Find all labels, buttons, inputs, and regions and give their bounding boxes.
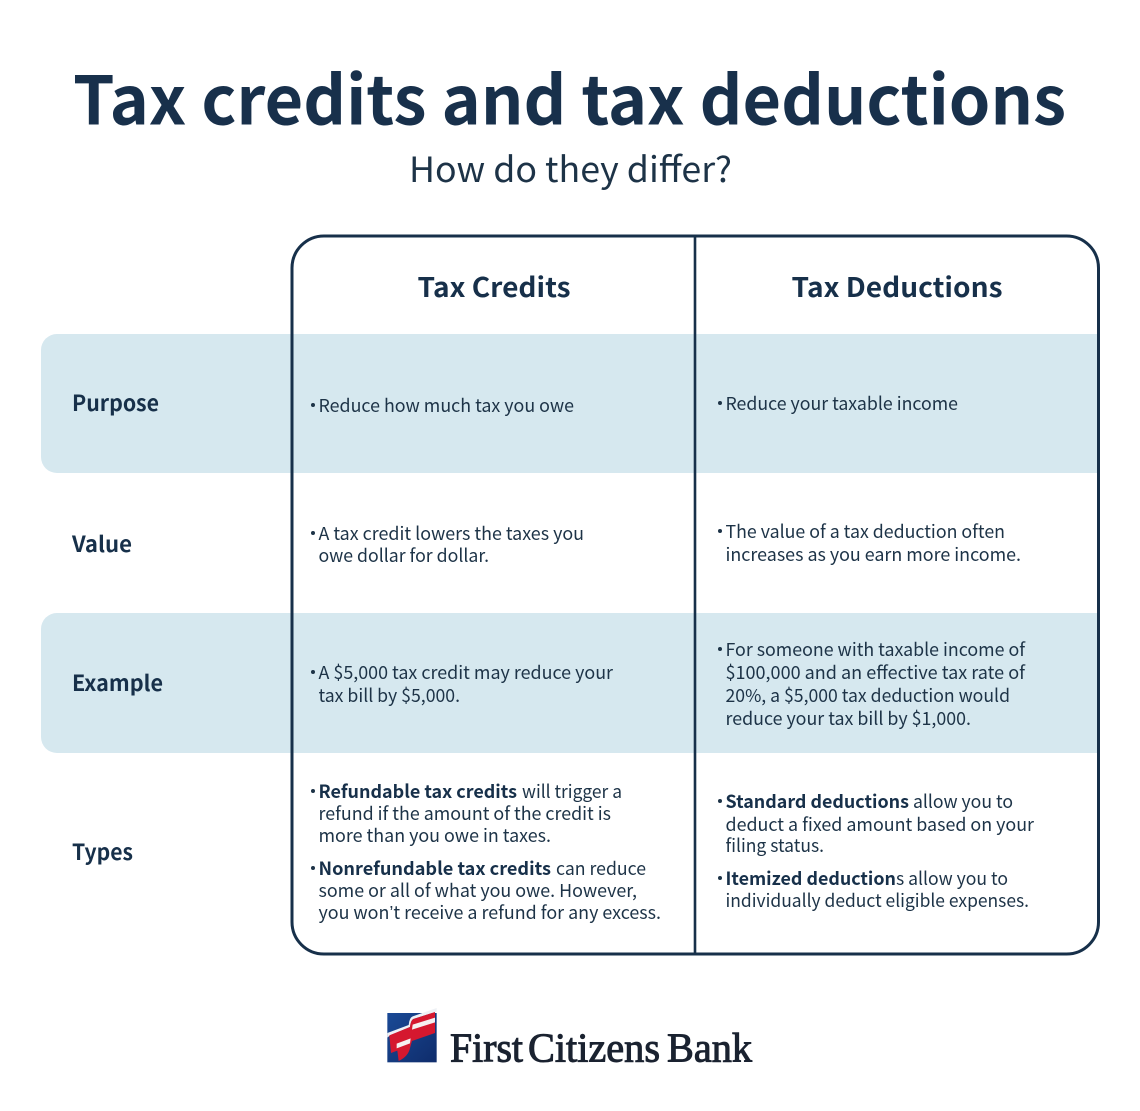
row label: purpose: Purpose [72,386,159,418]
example: tax deductions: For someone with taxable income of [726,636,1026,662]
example: tax credits: tax bill by $5,000. [318,682,460,708]
band: example row [41,613,1098,753]
band: purpose row [41,334,1098,473]
types: tax credits [311,778,661,925]
types: tax credits: Nonrefundable tax credits [318,855,551,881]
example: tax credits: A $5,000 tax credit may reduce your [318,659,614,685]
types: tax credits: will trigger a [522,778,622,804]
types: tax deductions: Standard deductions [726,788,909,814]
column divider [694,236,696,954]
subtitle: How do they differ? [409,142,732,193]
types: tax credits: more than you owe in taxes. [318,822,551,848]
logo: First Citizens Bank [387,1008,752,1070]
types: tax credits: refund if the amount of the credit is [318,800,611,826]
types: tax deductions: deduct a fixed amount based on your [726,811,1035,837]
example: tax deductions: $100,000 and an effective tax rate of [726,659,1026,685]
types: tax credits: can reduce [556,855,646,881]
row label: value: Value [71,527,132,559]
types: tax deductions: s allow you to [896,865,1008,891]
logo wordmark: Bank [667,1024,752,1070]
types: tax deductions [718,788,1035,913]
row label: types: Types [72,835,133,867]
types: tax deductions: filing status. [726,832,824,858]
heading: tax deductions: Tax Deductions [792,266,1002,305]
example: tax deductions: reduce your tax bill by $1,000. [726,705,971,731]
value: tax credits: A tax credit lowers the taxes you [318,520,584,546]
purpose: tax deductions: Reduce your taxable income [726,390,958,416]
value: tax credits: owe dollar for dollar. [318,542,489,568]
heading: tax credits: Tax Credits [418,266,570,305]
logo wordmark: First [450,1024,524,1070]
logo wordmark: Citizens [528,1024,660,1070]
value: tax deductions [718,518,1021,567]
types: tax deductions: Itemized deduction [726,865,896,891]
value: tax credits [311,520,584,568]
types: tax credits: some or all of what you owe. However, [318,877,637,903]
types: tax deductions: allow you to [913,788,1013,814]
example: tax deductions: 20%, a $5,000 tax deduction would [726,682,1010,708]
logo wordmark [450,1024,752,1070]
icon: flag mark [387,1008,437,1062]
title: Tax credits and tax deductions [73,48,1066,144]
value: tax deductions: The value of a tax deduction often [726,518,1005,544]
comparison table frame [292,236,1098,954]
types: tax credits: you won’t receive a refund for any excess. [318,899,661,925]
purpose: tax credits: Reduce how much tax you owe [318,392,574,418]
row label: example: Example [72,666,163,698]
example: tax deductions [718,636,1026,731]
types: tax credits: Refundable tax credits [318,778,517,804]
example: tax credits [311,659,614,708]
value: tax deductions: increases as you earn more income. [726,541,1021,567]
types: tax deductions: individually deduct eligible expenses. [726,887,1029,913]
